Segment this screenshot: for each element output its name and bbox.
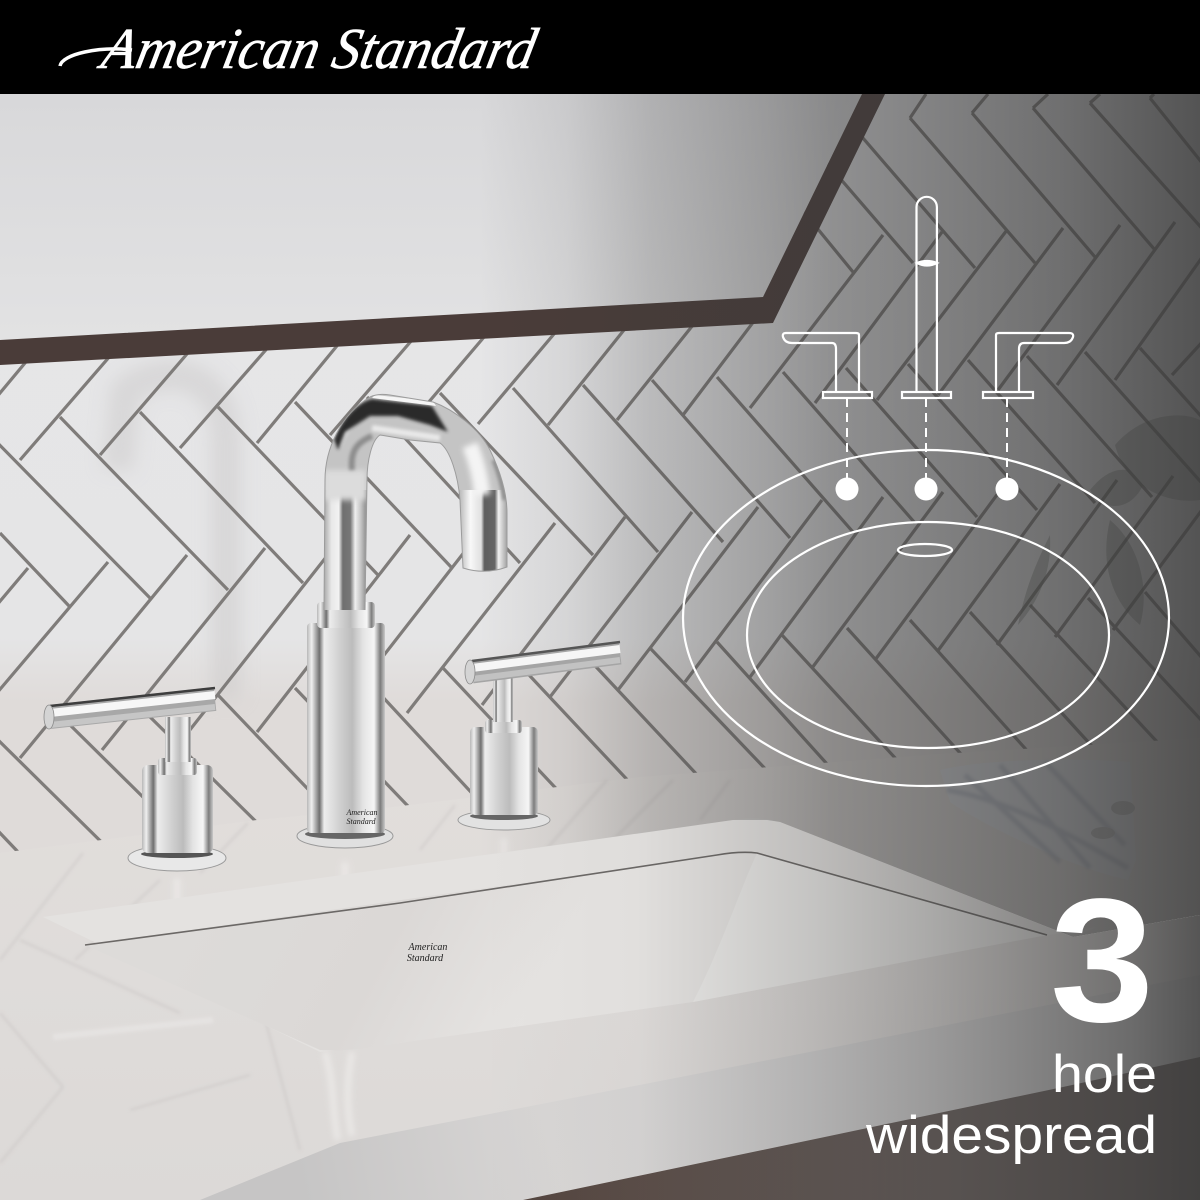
- outer sink outline: [683, 450, 1169, 786]
- icon: three mounting holes: [836, 478, 1018, 500]
- wall and counter-back gradient overlay: [480, 94, 1200, 937]
- left handle: [44, 688, 226, 871]
- drain opening: [898, 544, 952, 556]
- faucet reflections on the marble: [177, 838, 504, 1140]
- basin: [85, 852, 1047, 1050]
- right handle: [458, 642, 620, 830]
- icon: outline spout: [902, 197, 951, 398]
- spout outline: [324, 394, 507, 610]
- mirror frame: [0, 94, 885, 365]
- sink: [43, 818, 1097, 1052]
- folded towel: [940, 760, 1136, 880]
- brand logo: American Standard: [93, 17, 543, 81]
- label: widespread: widespread: [865, 1106, 1157, 1165]
- diagram: 3 hole faucet and sink outline: [683, 197, 1169, 786]
- icon: outline left handle: [783, 333, 872, 398]
- counter front face: [200, 975, 1200, 1200]
- faucet maker mark: Standard: [346, 817, 377, 826]
- number 3: 3: [1050, 863, 1154, 1059]
- dashed connector lines: [847, 398, 1007, 480]
- plant behind the diagram: [1018, 415, 1200, 625]
- soft faucet shadows on wall: [118, 375, 226, 700]
- mirror: [0, 94, 885, 365]
- label: hole: hole: [1052, 1045, 1157, 1104]
- wall background: [0, 94, 1200, 894]
- icon: outline right handle: [983, 333, 1073, 398]
- faucet maker mark: American: [345, 808, 378, 817]
- herringbone tile grout lines: [0, 94, 1200, 890]
- spout tube: [320, 390, 510, 615]
- sink and counter-front gradient overlay: [480, 820, 1200, 1200]
- inner basin outline: [747, 522, 1109, 748]
- cabinet: [523, 1057, 1200, 1200]
- basin right wall highlight: [693, 853, 1047, 1002]
- sink maker mark: Standard: [407, 953, 444, 964]
- sink maker mark: American: [408, 942, 447, 953]
- marble countertop: [0, 738, 1200, 1200]
- faucet spout: [297, 390, 510, 848]
- basin rim shadow line: [85, 852, 1047, 945]
- black header bar: [0, 0, 1200, 94]
